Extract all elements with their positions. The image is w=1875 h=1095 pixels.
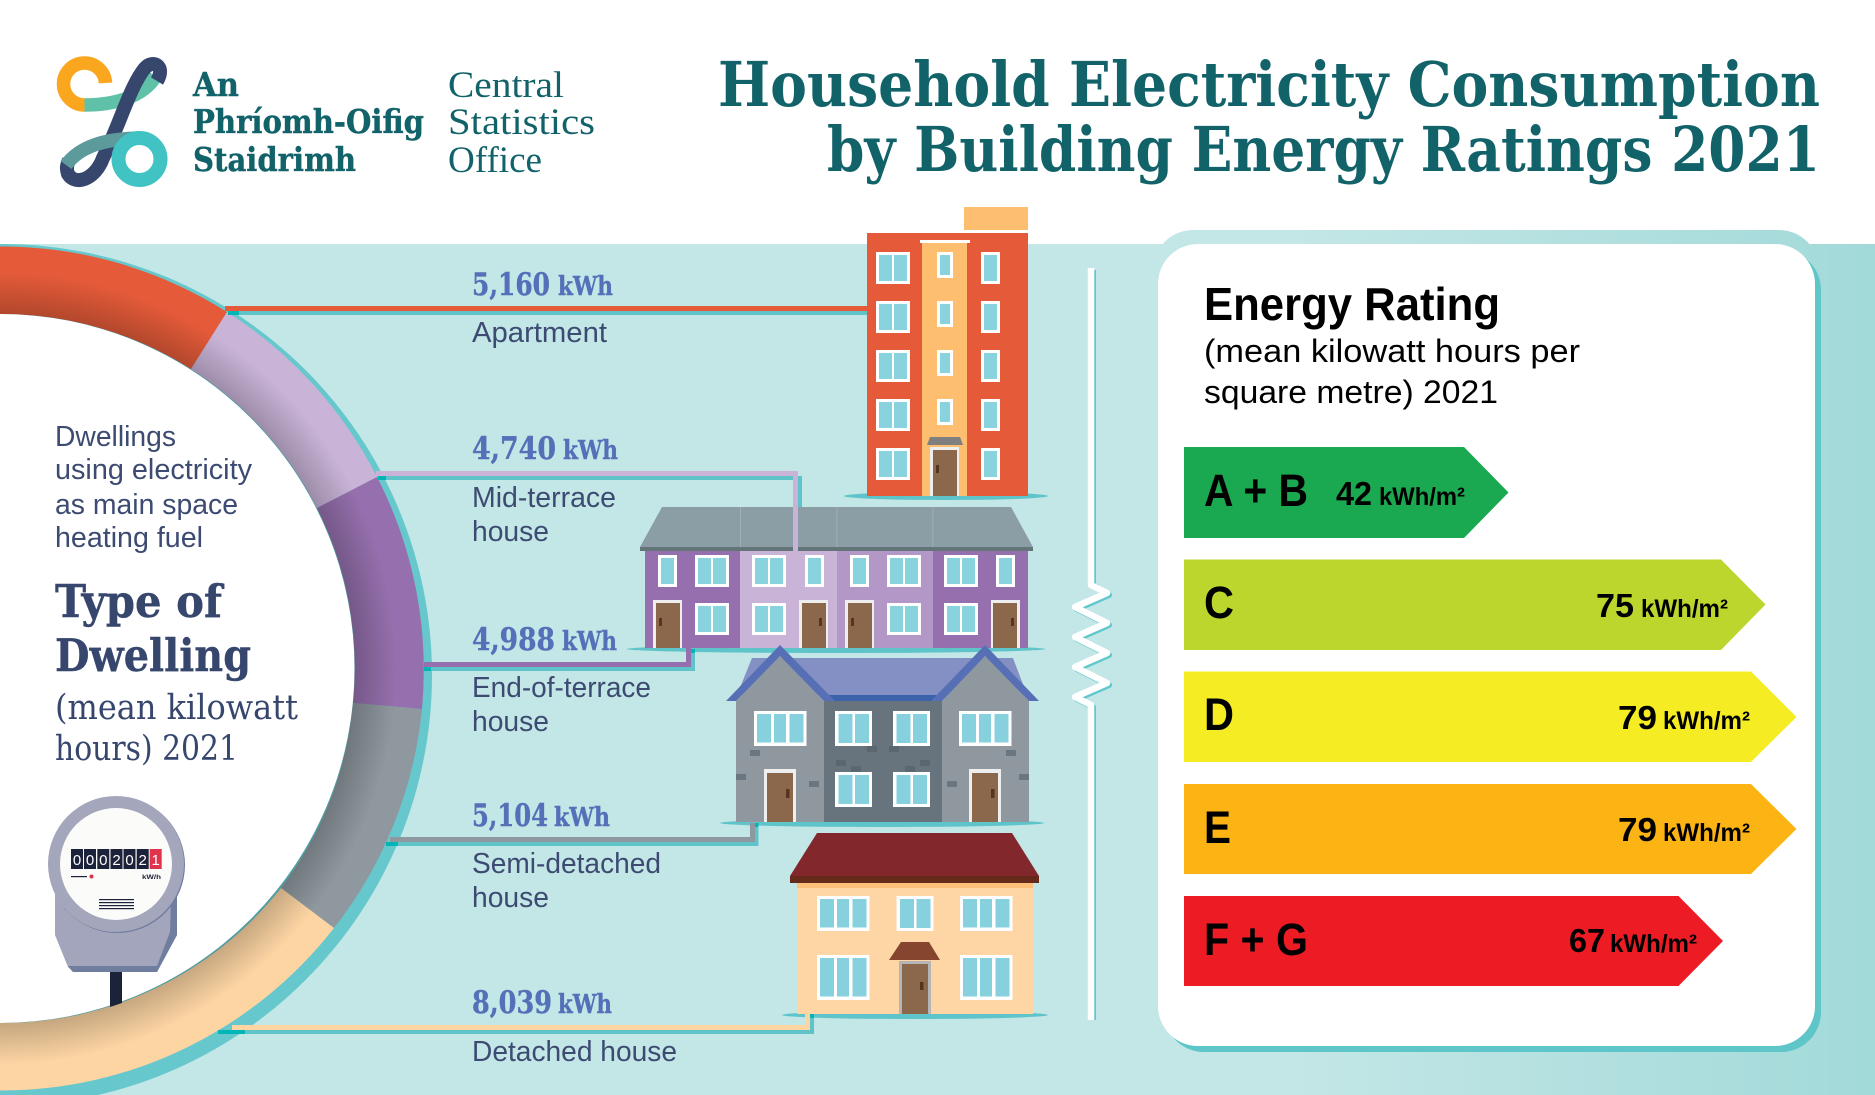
label: mid-terrace house: 4,740 <box>472 431 556 467</box>
ring: type of dwelling <box>0 244 432 1095</box>
label: detached house <box>472 985 677 1068</box>
logo: Central Statistics Office symbol <box>64 63 160 180</box>
text: dwellings intro: Dwellings <box>55 421 176 453</box>
bar: F + G <box>1184 896 1723 986</box>
label: apartment: kWh <box>558 272 613 302</box>
label: end-of-terrace house: kWh <box>562 627 617 657</box>
bar: D: kWh/m² <box>1663 707 1750 735</box>
building: mid-terrace and end-of-terrace row <box>627 507 1045 653</box>
bar: F + G: F + G <box>1204 914 1308 965</box>
label: semi-detached house <box>472 798 661 914</box>
logo text: Irish name: Staidrimh <box>193 140 356 179</box>
icon: electricity meter: kW/h <box>142 874 161 881</box>
label: semi-detached house: house <box>472 882 549 914</box>
building: semi-detached pair <box>720 645 1044 827</box>
logo text: English name: Office <box>448 140 542 181</box>
bar: E: E <box>1204 802 1231 853</box>
label: end-of-terrace house: house <box>472 706 549 738</box>
building: detached house <box>782 833 1048 1019</box>
bar: A + B <box>1184 447 1508 538</box>
building: apartment <box>844 207 1048 500</box>
label: detached house: 8,039 <box>472 985 552 1021</box>
icon: electricity meter: 0 <box>73 852 81 869</box>
logo text: Irish name: An <box>192 65 239 104</box>
bar: D <box>1184 672 1796 762</box>
text: dwellings intro: using electricity <box>55 454 252 486</box>
bar: E <box>1184 784 1796 874</box>
title <box>718 48 1820 186</box>
subheading: mean kilowatt hours per square metre <box>1204 333 1580 410</box>
bar: E: kWh/m² <box>1663 819 1750 847</box>
bar: A + B: 42 <box>1336 475 1372 512</box>
heading: type of dwelling: Type of <box>55 575 224 628</box>
label: end-of-terrace house: 4,988 <box>472 622 555 658</box>
leader line: semi-detached <box>386 823 758 846</box>
heading: type of dwelling: Dwelling <box>55 629 251 682</box>
bar: D: 79 <box>1618 699 1657 736</box>
label: mid-terrace house: Mid-terrace <box>472 482 616 514</box>
label: apartment: Apartment <box>472 317 607 349</box>
bar: C: kWh/m² <box>1641 595 1728 623</box>
label: mid-terrace house <box>472 431 618 548</box>
label: mid-terrace house: house <box>472 516 549 548</box>
text: dwellings intro <box>55 421 252 554</box>
bar: F + G: kWh/m² <box>1610 930 1697 958</box>
label: end-of-terrace house: End-of-terrace <box>472 672 651 704</box>
panel: energy rating <box>1153 230 1821 1052</box>
leader line: end-of-terrace <box>424 648 695 671</box>
subheading: mean kilowatt hours <box>55 688 298 769</box>
background band <box>0 244 1875 1095</box>
icon: electricity meter: 0 <box>99 852 107 869</box>
icon: electricity meter: 0 <box>125 852 134 869</box>
icon: electricity meter: 2 <box>112 852 121 869</box>
icon: electricity meter: 1 <box>152 852 160 869</box>
label: detached house: Detached house <box>472 1036 677 1068</box>
label: mid-terrace house: kWh <box>563 436 618 466</box>
label: detached house: kWh <box>558 990 612 1020</box>
bar: C: 75 <box>1596 587 1634 624</box>
subheading: mean kilowatt hours per square metre: square metre) 2021 <box>1204 374 1498 410</box>
logo text: English name <box>448 65 595 181</box>
heading: energy rating: Energy Rating <box>1204 278 1500 330</box>
subheading: mean kilowatt hours per square metre: (mean kilowatt hours per <box>1204 333 1580 369</box>
bar: A + B: kWh/m² <box>1379 483 1465 511</box>
label: apartment <box>472 267 613 349</box>
label: semi-detached house: 5,104 <box>472 798 548 834</box>
label: apartment: 5,160 <box>472 267 550 303</box>
icon: electricity meter: 2 <box>139 852 147 869</box>
bar: C: C <box>1204 577 1234 628</box>
text: dwellings intro: heating fuel <box>55 522 203 554</box>
label: semi-detached house: Semi-detached <box>472 848 661 880</box>
text: dwellings intro: as main space <box>55 489 238 521</box>
bar: A + B: A + B <box>1204 465 1308 516</box>
logo text: English name: Statistics <box>448 102 595 143</box>
label: end-of-terrace house <box>472 622 651 738</box>
logo text: English name: Central <box>448 65 564 106</box>
logo text: Irish name: Phríomh-Oifig <box>193 102 424 141</box>
icon: electricity meter <box>48 796 185 1007</box>
subheading: mean kilowatt hours: (mean kilowatt <box>55 688 298 728</box>
bar: F + G: 67 <box>1569 922 1605 959</box>
leader line: apartment <box>225 306 867 315</box>
leader line: mid-terrace <box>376 471 802 551</box>
heading: type of dwelling <box>55 575 251 682</box>
divider: zigzag line <box>1075 268 1109 1020</box>
leader line: detached <box>218 1014 814 1034</box>
label: semi-detached house: kWh <box>554 803 610 833</box>
subheading: mean kilowatt hours: hours) 2021 <box>55 729 238 769</box>
bar: D: D <box>1204 689 1234 740</box>
logo text: Irish name <box>192 65 424 179</box>
bar: E: 79 <box>1618 811 1657 848</box>
icon: electricity meter: 0 <box>86 852 94 869</box>
bar: C <box>1184 560 1766 650</box>
